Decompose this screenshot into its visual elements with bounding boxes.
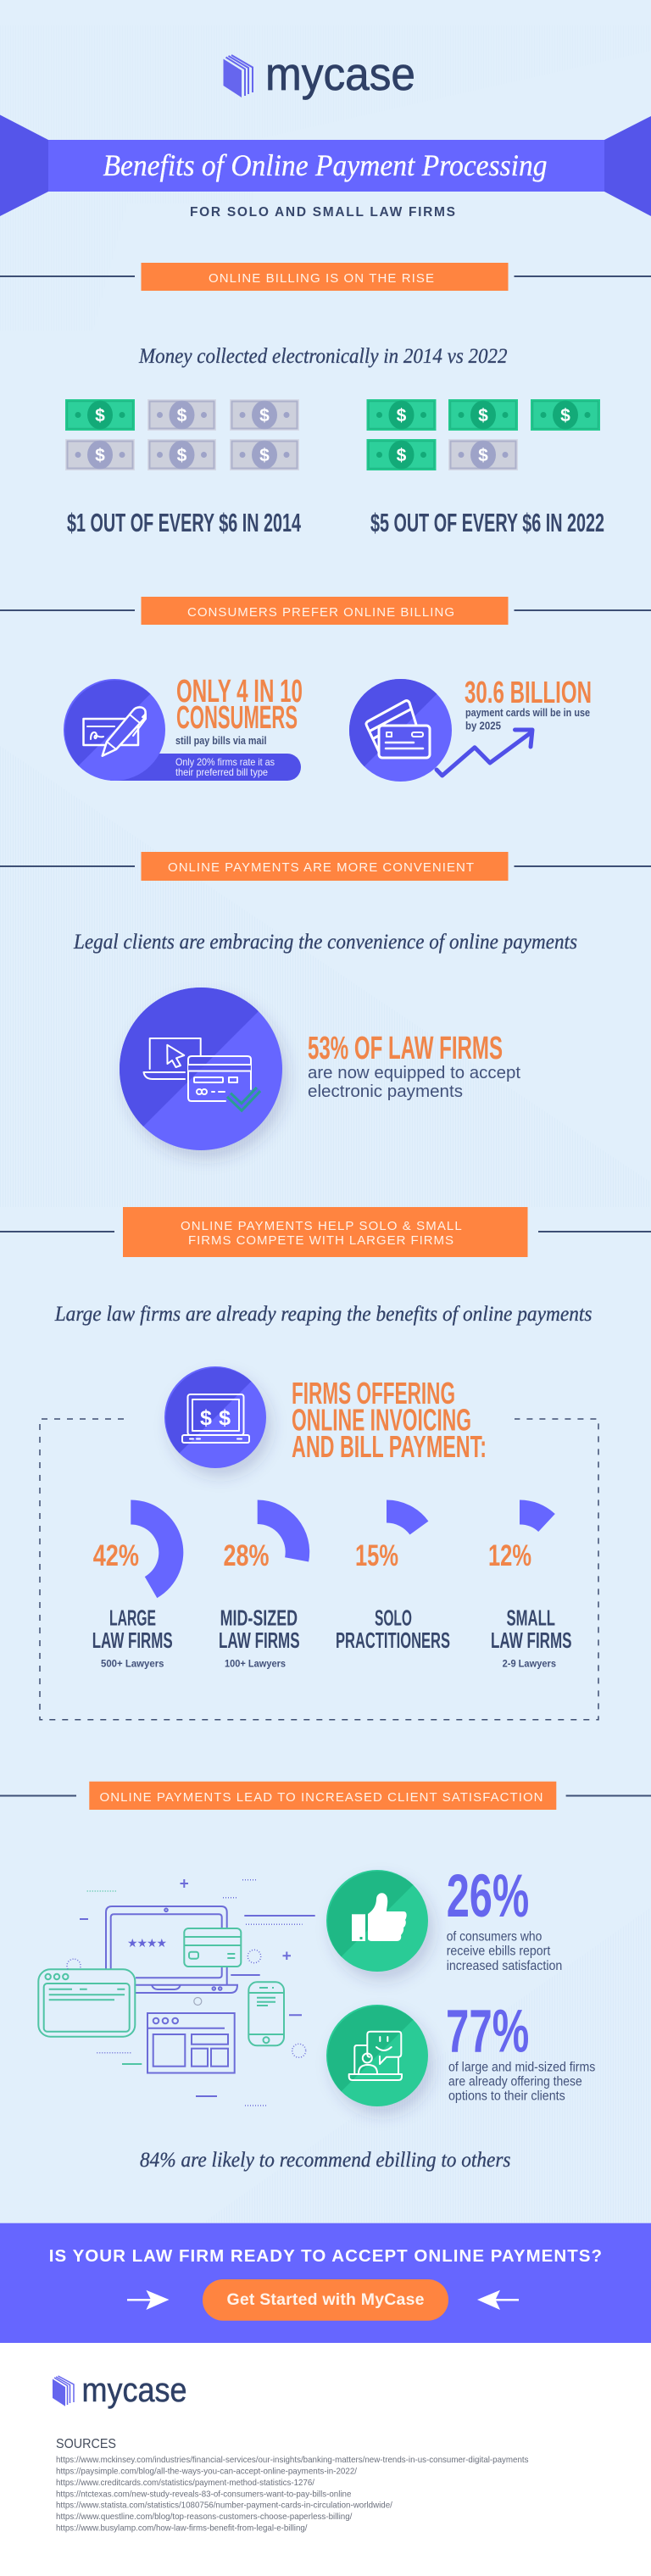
section banner: ONLINE PAYMENTS LEAD TO INCREASED CLIENT SATISFACTION bbox=[100, 1790, 542, 1805]
heading: firms offering: ONLINE INVOICING bbox=[292, 1403, 471, 1438]
section banner: ONLINE PAYMENTS ARE MORE CONVENIENT bbox=[168, 860, 474, 875]
money bills 2014: $ bbox=[95, 446, 105, 465]
illustration: devices bbox=[38, 1879, 315, 2106]
section banner bbox=[0, 852, 651, 881]
stat: 2014: $1 OUT OF EVERY $6 IN 2014 bbox=[67, 509, 301, 537]
money bills 2014: $ bbox=[259, 406, 270, 426]
logo: mycase header: mycase bbox=[265, 47, 415, 100]
money bills 2014 bbox=[65, 399, 299, 470]
stat: only 4 in 10 bbox=[175, 674, 303, 747]
section banner bbox=[0, 263, 651, 291]
arrow: rising trend bbox=[437, 730, 532, 776]
subtitle: FOR SOLO AND SMALL LAW FIRMS bbox=[190, 205, 455, 220]
panel: consumers prefer online billing bbox=[0, 597, 651, 782]
stat: 77%: are already offering these bbox=[448, 2075, 582, 2089]
heading: Large law firms are already reaping the benefits of online payments bbox=[54, 1303, 592, 1326]
callout pill: Only 20% firms rate it as bbox=[175, 756, 275, 768]
panel: online billing is on the rise bbox=[0, 263, 651, 537]
chart: mid-sized law firms 28% bbox=[219, 1500, 309, 1670]
chart: solo practitioners 15%: 15% bbox=[355, 1539, 398, 1572]
section banner: ONLINE BILLING IS ON THE RISE bbox=[209, 271, 434, 286]
stat: 30.6 billion: by 2025 bbox=[465, 720, 501, 732]
heading: Money collected electronically in 2014 vs 2022 bbox=[138, 345, 507, 368]
icon: payment cards bbox=[349, 679, 452, 782]
sources: https://www.questline.com/blog/top-reasons-customers-choose-paperless-billing/ bbox=[56, 2512, 352, 2522]
sources bbox=[56, 2437, 529, 2533]
heading: firms offering: AND BILL PAYMENT: bbox=[292, 1429, 487, 1464]
stat: only 4 in 10: ONLY 4 IN 10 bbox=[176, 674, 303, 709]
sources: https://www.mckinsey.com/industries/financial-services/our-insights/banking-matters/new-trends-in-us-consumer-digital-payments bbox=[56, 2455, 529, 2465]
stat: only 4 in 10: still pay bills via mail bbox=[175, 734, 266, 747]
panel: increased client satisfaction bbox=[0, 1782, 651, 2172]
panel: call to action bbox=[0, 2223, 651, 2343]
stat: 26%: 26% bbox=[447, 1863, 529, 1930]
stat: 77%: of large and mid-sized firms bbox=[448, 2060, 596, 2074]
stat: 53% of law firms: are now equipped to accept bbox=[308, 1064, 520, 1082]
money bills 2022: $ bbox=[478, 446, 488, 465]
chart: mid-sized law firms 28%: 100+ Lawyers bbox=[225, 1658, 286, 1670]
stat: 77%: options to their clients bbox=[448, 2089, 565, 2104]
chart: large law firms 42%: 500+ Lawyers bbox=[101, 1658, 164, 1670]
section banner: ONLINE PAYMENTS HELP SOLO & SMALL bbox=[181, 1219, 462, 1233]
stat: 30.6 billion: 30.6 BILLION bbox=[465, 675, 592, 709]
sources: https://www.busylamp.com/how-law-firms-benefit-from-legal-e-billing/ bbox=[56, 2523, 308, 2533]
chart: small law firms 12%: 2-9 Lawyers bbox=[503, 1658, 556, 1670]
money bills 2014: $ bbox=[95, 406, 105, 426]
call to action heading: IS YOUR LAW FIRM READY TO ACCEPT ONLINE PAYMENTS? bbox=[49, 2246, 602, 2266]
sources: https://www.creditcards.com/statistics/payment-method-statistics-1276/ bbox=[56, 2478, 314, 2488]
panel: competing with larger firms bbox=[0, 1207, 651, 1720]
chart: large law firms 42% bbox=[92, 1500, 183, 1670]
stat: 53% of law firms: 53% OF LAW FIRMS bbox=[308, 1031, 503, 1066]
chart: small law firms 12%: 12% bbox=[488, 1539, 531, 1572]
sources: SOURCES bbox=[56, 2437, 116, 2451]
panel: online payments are more convenient bbox=[0, 852, 651, 1150]
icon: laptop with dollars: $$ bbox=[200, 1406, 231, 1430]
money bills 2022: $ bbox=[397, 406, 407, 426]
chart: large law firms 42%: LARGE bbox=[109, 1605, 156, 1631]
chart: small law firms 12%: SMALL bbox=[507, 1605, 555, 1631]
icon: check and pen bbox=[64, 679, 165, 781]
sources: https://ntctexas.com/new-study-reveals-83-of-consumers-want-to-pay-bills-online bbox=[56, 2489, 352, 2499]
chart: solo practitioners 15% bbox=[336, 1500, 450, 1653]
logo: mycase footer: mycase bbox=[81, 2372, 186, 2409]
callout pill bbox=[110, 754, 301, 781]
money bills 2022: $ bbox=[560, 406, 570, 426]
arrow: right-pointing bbox=[127, 2290, 170, 2310]
icon: laptop and card with check bbox=[120, 988, 282, 1150]
stat: 30.6 billion bbox=[465, 675, 592, 732]
chart: solo practitioners 15%: PRACTITIONERS bbox=[336, 1627, 450, 1653]
chart: small law firms 12% bbox=[488, 1499, 571, 1670]
stat: 26%: increased satisfaction bbox=[447, 1959, 562, 1973]
section banner bbox=[0, 1207, 651, 1257]
heading: firms offering: FIRMS OFFERING bbox=[292, 1376, 455, 1410]
money bills 2022: $ bbox=[397, 446, 407, 465]
icon: video chat bbox=[326, 2005, 428, 2106]
stat: 26%: receive ebills report bbox=[447, 1945, 551, 1959]
button: Get Started with MyCase bbox=[227, 2290, 425, 2309]
chart: mid-sized law firms 28%: 28% bbox=[224, 1539, 270, 1572]
arrow: left-pointing bbox=[477, 2290, 519, 2310]
stat: 77%: 77% bbox=[446, 1999, 529, 2066]
callout pill: their preferred bill type bbox=[175, 766, 268, 778]
section banner bbox=[0, 1782, 651, 1810]
illustration: devices: ★★★★ bbox=[127, 1937, 167, 1950]
chart: large law firms 42%: 42% bbox=[93, 1539, 139, 1572]
icon: thumbs up bbox=[326, 1870, 428, 1972]
chart: large law firms 42%: LAW FIRMS bbox=[92, 1627, 173, 1653]
dashed frame bbox=[40, 1419, 598, 1720]
closing statement: 84% are likely to recommend ebilling to others bbox=[140, 2149, 510, 2172]
money bills 2014: $ bbox=[177, 446, 187, 465]
chart: solo practitioners 15%: SOLO bbox=[375, 1605, 412, 1631]
chart: small law firms 12%: LAW FIRMS bbox=[491, 1627, 571, 1653]
section banner bbox=[0, 597, 651, 625]
money bills 2014: $ bbox=[259, 446, 270, 465]
title banner bbox=[0, 115, 651, 216]
sources: https://www.statista.com/statistics/1080756/number-payment-cards-in-circulation-worldwide/ bbox=[56, 2501, 392, 2511]
button bbox=[203, 2279, 448, 2321]
money bills 2014: $ bbox=[177, 406, 187, 426]
heading: Legal clients are embracing the convenience of online payments bbox=[73, 931, 577, 954]
stat: only 4 in 10: CONSUMERS bbox=[176, 700, 298, 736]
icon: laptop with dollars bbox=[164, 1366, 266, 1468]
section banner: FIRMS COMPETE WITH LARGER FIRMS bbox=[188, 1233, 453, 1248]
stat: 53% of law firms: electronic payments bbox=[308, 1082, 463, 1101]
heading: firms offering bbox=[292, 1376, 487, 1464]
stat: 77% bbox=[446, 1999, 596, 2104]
sources: https://paysimple.com/blog/all-the-ways-you-can-accept-online-payments-in-2022/ bbox=[56, 2467, 357, 2477]
stat: 26%: of consumers who bbox=[447, 1929, 542, 1944]
money bills 2022: $ bbox=[478, 406, 488, 426]
title banner: Benefits of Online Payment Processing bbox=[103, 148, 548, 182]
money bills 2022 bbox=[366, 399, 600, 470]
stat: 53% of law firms bbox=[308, 1031, 520, 1101]
stat: 30.6 billion: payment cards will be in use bbox=[465, 706, 590, 719]
stat: 26% bbox=[447, 1863, 562, 1973]
chart: mid-sized law firms 28%: MID-SIZED bbox=[220, 1605, 298, 1631]
chart: mid-sized law firms 28%: LAW FIRMS bbox=[219, 1627, 300, 1653]
section banner: CONSUMERS PREFER ONLINE BILLING bbox=[187, 605, 454, 620]
